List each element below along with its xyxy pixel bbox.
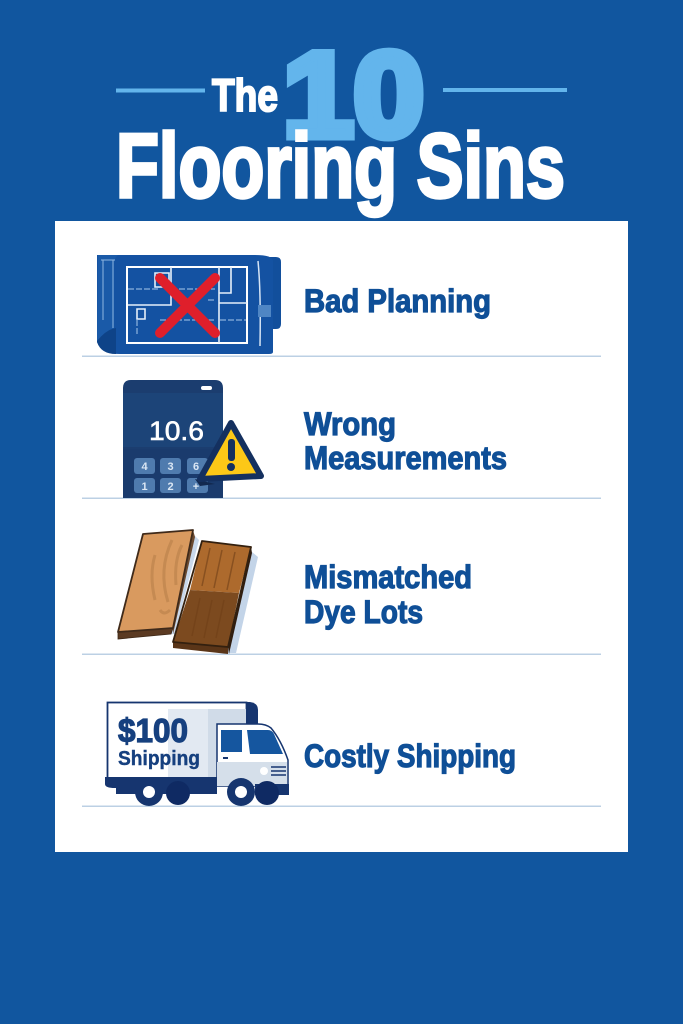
icon: shipping truck with $100: $100 — [118, 712, 188, 749]
icon: calculator with warning triangle — [123, 380, 261, 498]
icon: shipping truck with $100 — [105, 702, 289, 806]
icon: calculator with warning triangle: 6 — [193, 461, 199, 473]
icon: mismatched wood planks — [118, 530, 258, 654]
text: Mismatched Dye Lots: Mismatched — [304, 559, 472, 595]
text: Wrong Measurements: Measurements — [304, 440, 507, 476]
text: Bad Planning: Bad Planning — [304, 283, 491, 319]
icon: calculator with warning triangle: 4 — [141, 461, 148, 473]
icon: calculator with warning triangle: 10.6 — [149, 416, 204, 446]
icon: calculator with warning triangle: + — [193, 481, 199, 493]
text: Costly Shipping: Costly Shipping — [304, 738, 516, 774]
icon: blueprint with red X — [97, 255, 281, 354]
title: Flooring Sins — [116, 116, 565, 217]
icon: shipping truck with $100: Shipping — [118, 748, 200, 770]
icon: calculator with warning triangle: 2 — [167, 481, 174, 493]
text: Wrong Measurements: Wrong — [304, 406, 396, 442]
text: Wrong Measurements — [304, 406, 507, 476]
title: The — [212, 70, 278, 121]
icon: calculator with warning triangle: 1 — [141, 481, 148, 493]
text: Mismatched Dye Lots: Dye Lots — [304, 594, 423, 630]
title: 10 — [283, 28, 424, 162]
panel: flooring sins list — [55, 221, 628, 852]
text: Mismatched Dye Lots — [304, 559, 472, 630]
icon: calculator with warning triangle: 3 — [167, 461, 174, 473]
title — [116, 28, 567, 217]
